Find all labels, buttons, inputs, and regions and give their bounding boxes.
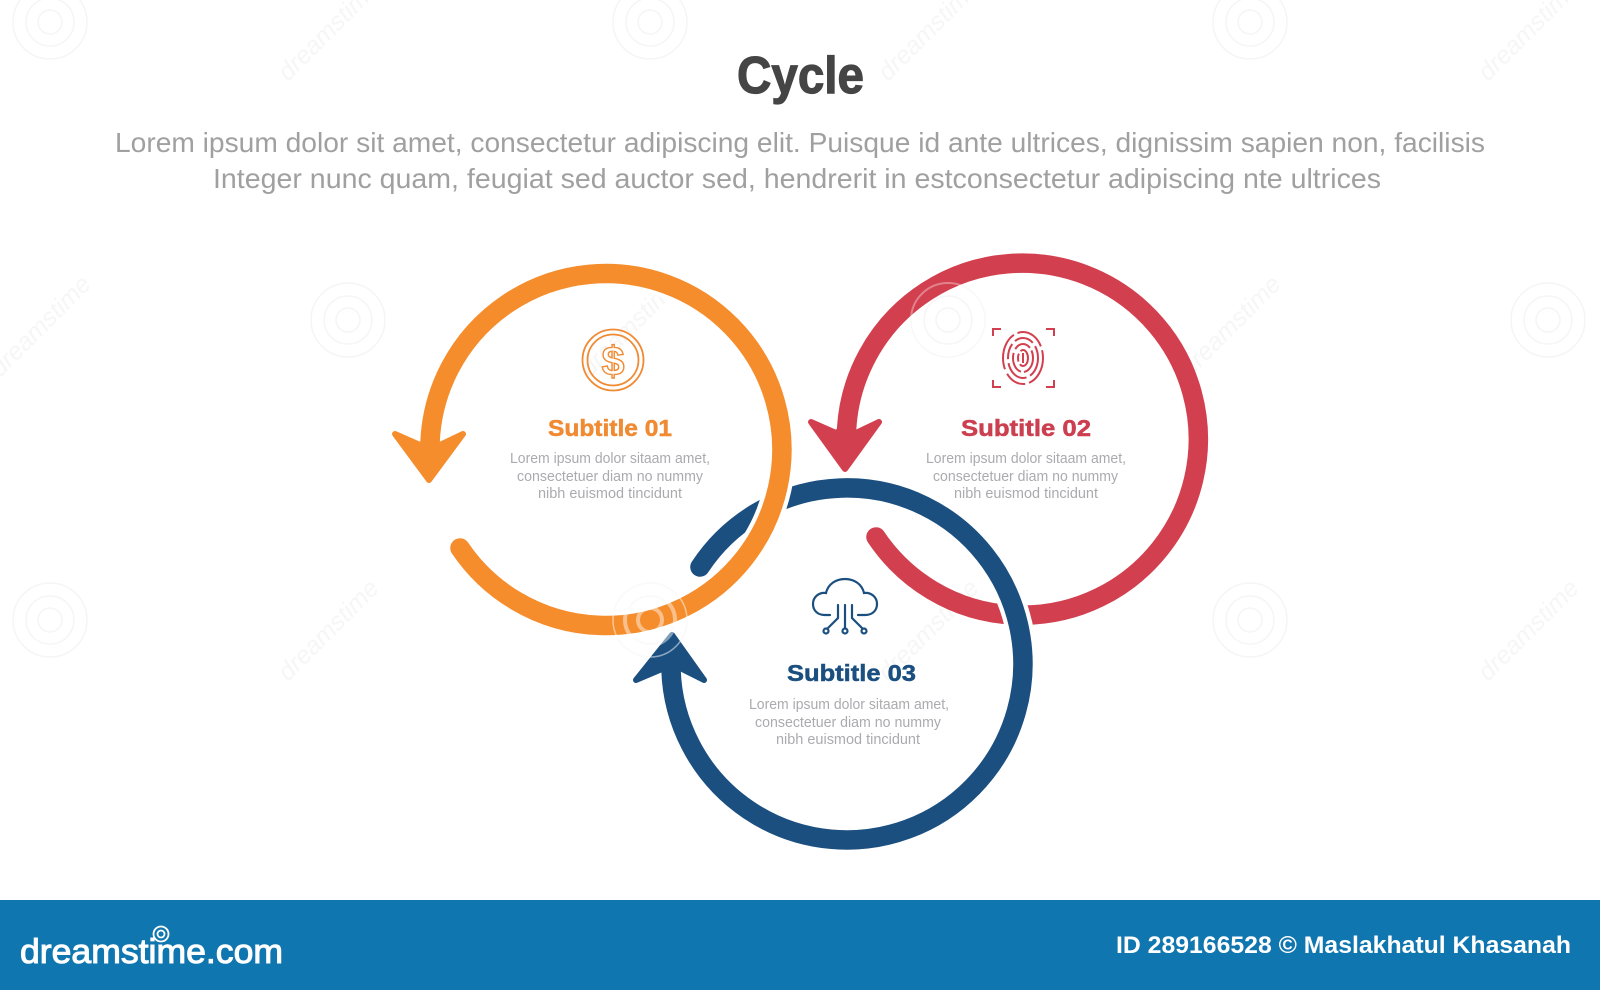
icon: dollar coin	[582, 330, 644, 390]
description text: Lorem ipsum dolor sit amet, consectetur adipiscing elit. Puisque id ante ultrices, dignissim sapien non, facilisis	[115, 127, 1485, 158]
watermark layer: dreamstime	[574, 270, 687, 382]
panel: subtitle 01 orange cycle	[395, 274, 782, 626]
footer logo text: dreamstime.com	[20, 933, 283, 971]
title: Cycle	[737, 47, 864, 105]
red circular arrow	[811, 263, 1198, 615]
icon: footer spiral	[154, 926, 168, 942]
icon: dollar coin: $	[602, 338, 625, 384]
subtitle 02: Subtitle 02	[961, 415, 1091, 441]
footer bar	[0, 900, 1600, 990]
watermark layer: dreamstime	[1472, 574, 1585, 686]
subtitle 01 body text	[510, 451, 710, 502]
description text	[115, 127, 1485, 194]
panel: subtitle 03 blue cycle	[636, 488, 1023, 840]
subtitle 03 body text: nibh euismod tincidunt	[776, 732, 920, 748]
blue circular arrow	[636, 488, 1023, 840]
subtitle 01 body text: consectetuer diam no nummy	[517, 469, 704, 485]
subtitle 02 body text: Lorem ipsum dolor sitaam amet,	[926, 451, 1126, 467]
subtitle 01 body text: nibh euismod tincidunt	[538, 486, 682, 502]
subtitle 03 body text	[749, 697, 949, 748]
icon: fingerprint	[993, 329, 1054, 387]
subtitle 01: Subtitle 01	[548, 415, 672, 441]
orange circular arrow	[395, 274, 782, 626]
blue arc halo	[671, 488, 1023, 840]
orange arc halo	[430, 274, 782, 626]
subtitle 03 body text: Lorem ipsum dolor sitaam amet,	[749, 697, 949, 713]
description text: Integer nunc quam, feugiat sed auctor sed, hendrerit in estconsectetur adipiscing nte ultrices	[213, 163, 1381, 194]
icon: cloud network	[813, 579, 877, 634]
subtitle 03: Subtitle 03	[787, 660, 916, 686]
subtitle 02 body text: nibh euismod tincidunt	[954, 486, 1098, 502]
subtitle 02 body text	[926, 451, 1126, 502]
watermark layer: dreamstime	[872, 574, 985, 686]
watermark layer: dreamstime	[1174, 270, 1287, 382]
footer credit: ID 289166528 © Maslakhatul Khasanah	[1116, 932, 1571, 959]
watermark spiral overlay	[613, 283, 985, 657]
watermark layer	[0, 0, 1585, 686]
subtitle 01 body text: Lorem ipsum dolor sitaam amet,	[510, 451, 710, 467]
subtitle 03 body text: consectetuer diam no nummy	[755, 715, 942, 731]
panel: subtitle 02 red cycle	[811, 263, 1198, 615]
subtitle 02 body text: consectetuer diam no nummy	[933, 469, 1119, 485]
watermark layer: dreamstime	[272, 574, 385, 686]
